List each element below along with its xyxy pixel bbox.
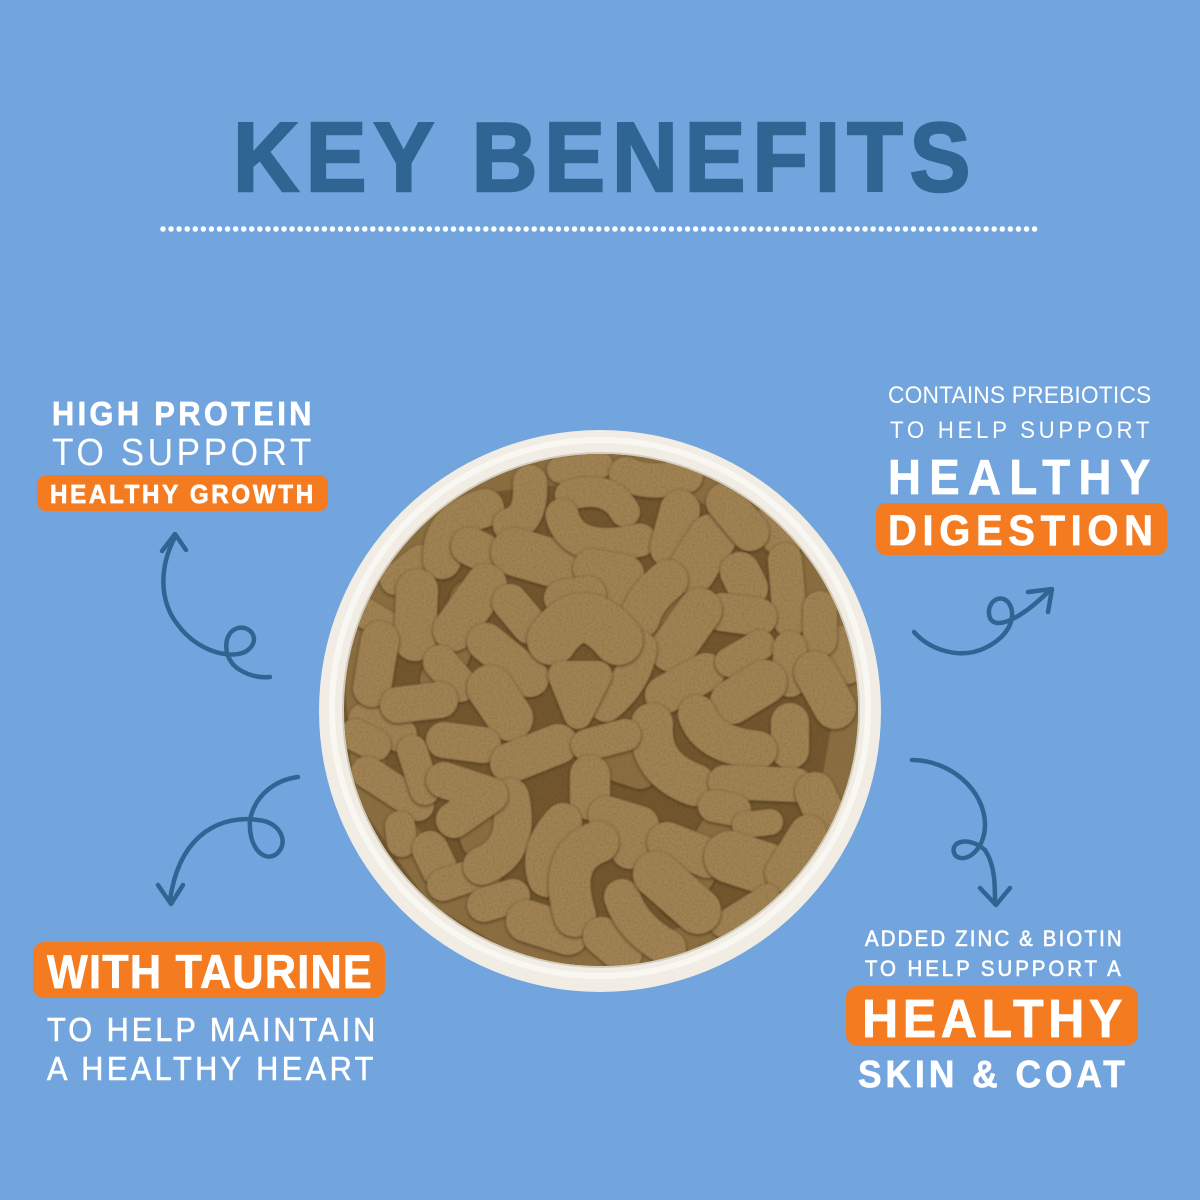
kibble [340,450,860,970]
callout: healthy skin and coat: ADDED ZINC & BIOTIN [865,926,1122,951]
callout: healthy digestion: TO HELP SUPPORT [890,416,1149,443]
arrow: skin and coat [912,760,1010,905]
callout: high protein [37,395,328,511]
callout: with taurine: WITH TAURINE [47,945,372,998]
callout: healthy digestion: HEALTHY [888,451,1150,505]
kibble texture [340,450,860,970]
callout: healthy digestion [876,381,1167,555]
callout: high protein: TO SUPPORT [52,431,311,473]
arrow: taurine [158,777,298,904]
callout: healthy skin and coat: SKIN & COAT [858,1053,1125,1095]
arrow: high protein [162,534,270,677]
callout: healthy skin and coat: HEALTHY [862,989,1122,1049]
callout: high protein: HIGH PROTEIN [52,395,311,432]
callout: healthy digestion: CONTAINS PREBIOTICS [888,381,1151,408]
bowl of kibble [319,430,881,992]
bowl rim [319,430,881,992]
callout: healthy digestion: DIGESTION [888,506,1153,554]
callout: high protein: HEALTHY GROWTH [50,480,313,509]
callout: with taurine: TO HELP MAINTAIN [47,1011,375,1048]
callout: with taurine [33,942,385,1087]
title: KEY BENEFITS [233,103,970,213]
callout: with taurine: A HEALTHY HEART [47,1050,373,1087]
arrow: digestion [914,589,1052,653]
callout: healthy skin and coat: TO HELP SUPPORT A [865,956,1122,981]
callout: healthy skin and coat [846,926,1138,1095]
